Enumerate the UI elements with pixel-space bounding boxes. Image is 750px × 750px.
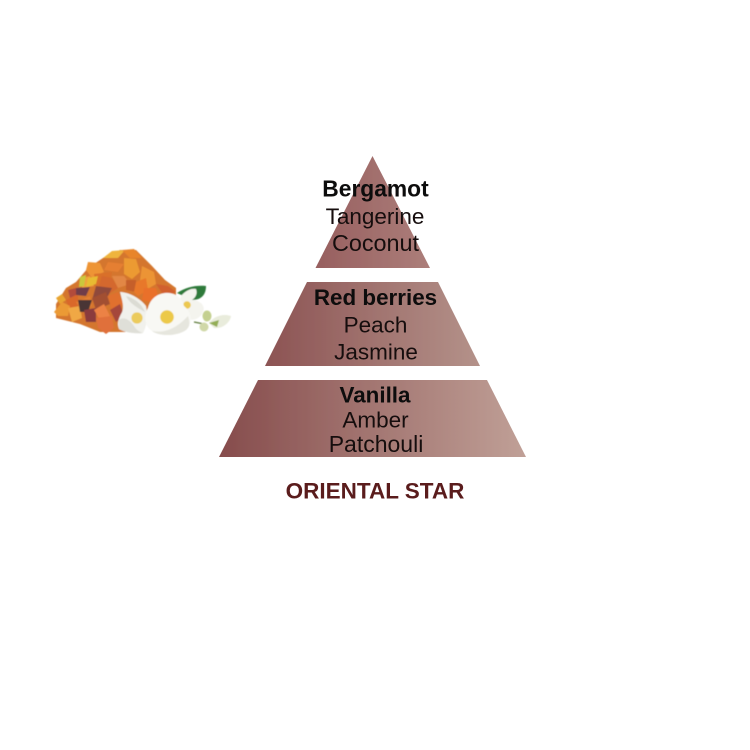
panel: top tier — [316, 156, 430, 268]
text: base notes: Amber — [342, 408, 409, 432]
leaf — [177, 286, 206, 300]
title: ORIENTAL STAR — [286, 478, 464, 504]
text: heart notes: Jasmine — [334, 340, 418, 364]
back flower — [180, 289, 204, 320]
front flower — [145, 293, 191, 335]
text: heart notes: Red berries — [314, 285, 437, 310]
text: top notes — [322, 176, 429, 256]
icon: pile of amber resin with jasmine flowers — [54, 249, 231, 335]
panel: bottom tier — [219, 380, 526, 457]
text: heart notes: Peach — [344, 312, 407, 338]
text: heart notes — [314, 285, 437, 364]
text: top notes: Tangerine — [326, 204, 424, 229]
buds — [194, 310, 231, 332]
text: base notes: Patchouli — [329, 431, 423, 457]
text: base notes — [329, 382, 423, 457]
left flower — [118, 292, 147, 333]
text: top notes: Bergamot — [322, 176, 429, 202]
panel: middle tier — [265, 282, 480, 366]
text: top notes: Coconut — [332, 230, 420, 256]
resin pile — [54, 249, 176, 334]
text: base notes: Vanilla — [340, 382, 411, 408]
